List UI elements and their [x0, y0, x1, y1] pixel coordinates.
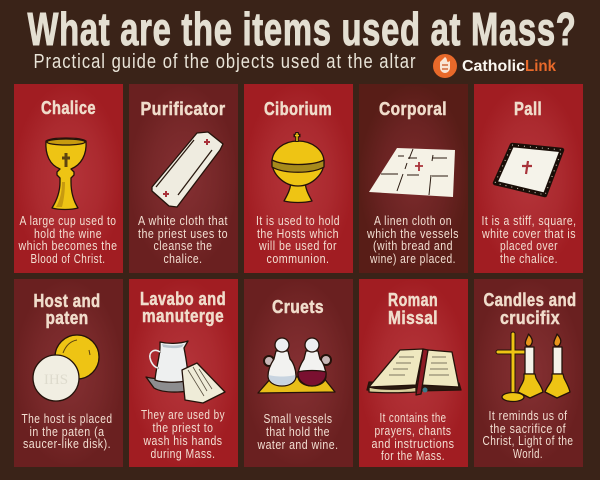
logo: CatholicLink: Catholic: [462, 58, 525, 75]
heading: Pall: Pall: [514, 98, 542, 119]
description: Ciborium: [256, 213, 340, 266]
heading: Roman Missal: [388, 289, 438, 328]
icon: host and paten: IHS: [44, 372, 68, 388]
description: Host and paten: saucer-like disk).: [23, 436, 111, 451]
description: Candles and crucifix: Christ, Light of the: [482, 433, 574, 448]
heading: Lavabo and manuterge: manuterge: [142, 305, 224, 326]
heading: Cruets: Cruets: [272, 296, 324, 317]
heading: Chalice: Chalice: [41, 97, 96, 118]
heading: Lavabo and manuterge: Lavabo and: [140, 288, 226, 309]
heading: Ciborium: Ciborium: [264, 98, 332, 119]
description: Corporal: wine) are placed.: [369, 251, 456, 266]
panel: Corporal: [359, 84, 468, 273]
heading: Host and paten: paten: [46, 307, 88, 328]
icon: roman missal: [367, 349, 461, 395]
panel: Roman Missal: [359, 279, 468, 467]
description: Pall: placed over: [500, 238, 558, 253]
panel: Host and paten: [14, 279, 123, 467]
description: Chalice: [18, 213, 117, 266]
description: Candles and crucifix: the sacrifice of: [490, 421, 566, 436]
description: Purificator: [138, 213, 228, 266]
heading: Host and paten: [34, 290, 100, 328]
description: Purificator: chalice.: [164, 251, 202, 266]
description: Roman Missal: and instructions: [372, 436, 454, 451]
description: Roman Missal: It contains the: [380, 410, 446, 425]
logo: CatholicLink: [433, 54, 556, 78]
description: Chalice: Blood of Christ.: [30, 251, 106, 266]
description: Roman Missal: for the Mass.: [381, 448, 445, 463]
description: Host and paten: [22, 411, 112, 451]
description: Pall: [481, 213, 576, 266]
description: Host and paten: in the paten (a: [30, 424, 105, 439]
description: Cruets: [257, 411, 338, 452]
icon: chalice: [46, 138, 86, 210]
description: Purificator: the priest uses to: [138, 226, 228, 241]
description: Purificator: cleanse the: [154, 238, 212, 253]
heading: Roman Missal: Roman: [388, 289, 438, 310]
icon: lavabo and manuterge: [146, 341, 225, 403]
description: Candles and crucifix: [482, 408, 574, 461]
heading: Candles and crucifix: [484, 289, 576, 328]
icon: pall: [495, 145, 562, 195]
description: Corporal: (with bread and: [373, 238, 453, 253]
description: Ciborium: the Hosts which: [257, 226, 339, 241]
heading: Lavabo and manuterge: [140, 288, 226, 326]
heading: Roman Missal: Missal: [388, 307, 438, 328]
heading: Corporal: Corporal: [379, 98, 447, 119]
description: Chalice: which becomes the: [18, 238, 117, 253]
panel: Lavabo and manuterge: [129, 279, 238, 467]
description: Roman Missal: prayers, chants: [374, 423, 452, 438]
description: Ciborium: will be used for: [258, 238, 337, 253]
description: Ciborium: It is used to hold: [256, 213, 340, 228]
heading: Purificator: Purificator: [140, 98, 226, 119]
description: Chalice: A large cup used to: [20, 213, 116, 228]
description: Purificator: A white cloth that: [138, 213, 228, 228]
icon: ciborium: [272, 132, 324, 202]
description: Ciborium: communion.: [266, 251, 330, 266]
description: Lavabo and manuterge: They are used by: [141, 407, 225, 422]
description: Pall: It is a stiff, square,: [482, 213, 576, 228]
description: Cruets: Small vessels: [264, 411, 332, 426]
description: Cruets: that hold the: [266, 424, 330, 439]
panel: Chalice: [14, 84, 123, 273]
description: Corporal: [366, 213, 459, 266]
description: Corporal: A linen cloth on: [374, 213, 452, 228]
description: Cruets: water and wine.: [257, 437, 338, 452]
description: Lavabo and manuterge: during Mass.: [150, 446, 216, 461]
description: Pall: the chalice.: [500, 251, 558, 266]
description: Lavabo and manuterge: [141, 407, 225, 461]
panel: Pall: [474, 84, 583, 273]
panel: Candles and crucifix: [474, 279, 583, 467]
panel: Ciborium: [244, 84, 353, 273]
icon: candles and crucifix: [498, 334, 570, 402]
heading: Candles and crucifix: crucifix: [500, 307, 560, 328]
description: Lavabo and manuterge: the priest to: [152, 420, 214, 435]
description: Chalice: hold the wine: [34, 226, 102, 241]
description: Corporal: which the vessels: [366, 226, 459, 241]
heading: Host and paten: Host and: [34, 290, 100, 311]
description: Pall: white cover that is: [481, 226, 576, 241]
subtitle: Practical guide of the objects used at the altar: [34, 51, 416, 73]
icon: corporal: [369, 148, 455, 197]
panel: Purificator: [129, 84, 238, 273]
description: Candles and crucifix: It reminds us of: [488, 408, 568, 423]
description: Host and paten: The host is placed: [22, 411, 112, 426]
heading: Candles and crucifix: Candles and: [484, 289, 576, 310]
description: Lavabo and manuterge: wash his hands: [143, 433, 222, 448]
panel: Cruets: [244, 279, 353, 467]
description: Candles and crucifix: World.: [513, 446, 543, 461]
description: Roman Missal: [372, 410, 454, 463]
logo: CatholicLink: Link: [525, 58, 556, 75]
icon: cruets: [258, 338, 335, 393]
icon: host and paten: [33, 335, 99, 401]
icon: purificator: [152, 132, 223, 207]
